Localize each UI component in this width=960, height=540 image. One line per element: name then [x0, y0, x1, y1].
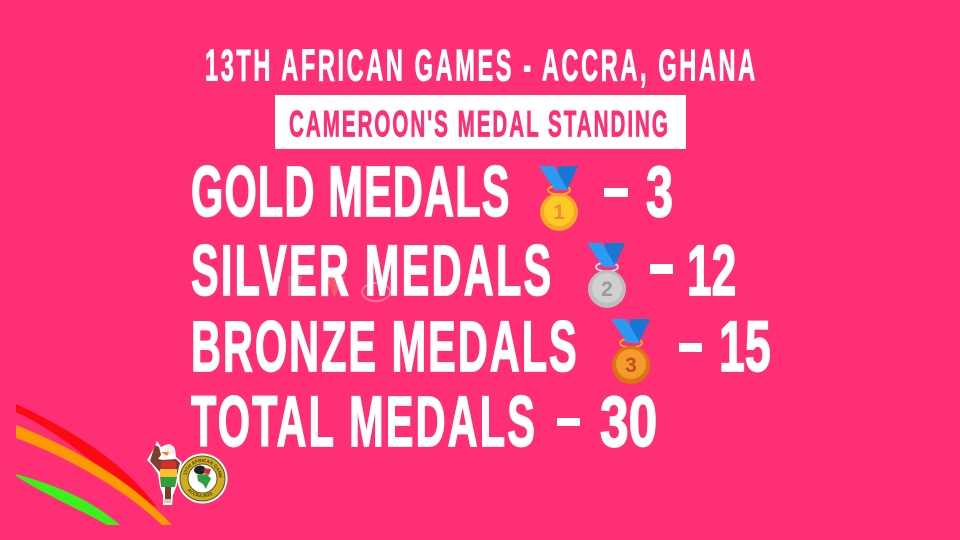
- subtitle banner: [275, 95, 686, 149]
- icon: games logo badge: [178, 454, 228, 504]
- subtitle banner: CAMEROON'S MEDAL STANDING: [289, 104, 668, 145]
- icon: games logo badge: 13TH AFRICAN GAMES: [184, 458, 222, 478]
- row: total medals: TOTAL MEDALS: [191, 382, 535, 462]
- icon: mascot: [147, 441, 182, 505]
- icon: games logo badge: ACCRA 2023: [187, 488, 212, 498]
- row: silver medals: [191, 230, 736, 311]
- icon: bronze medal: 3: [625, 354, 637, 377]
- row: bronze medals: [191, 306, 771, 387]
- title: 13TH AFRICAN GAMES - ACCRA, GHANA: [205, 41, 755, 90]
- row: gold medals: 3: [646, 152, 673, 231]
- row: silver medals: 12: [687, 230, 736, 311]
- row: bronze medals: 15: [719, 306, 771, 386]
- row: total medals: 30: [600, 383, 657, 462]
- decorative swooshes: [16, 404, 172, 525]
- icon: gold medal: 1: [553, 201, 565, 224]
- icon: silver medal: [587, 243, 626, 308]
- row: gold medals: GOLD MEDALS: [191, 152, 509, 232]
- row: silver medals: SILVER MEDALS: [191, 231, 551, 311]
- icon: silver medal: 2: [601, 278, 613, 301]
- row: gold medals: [191, 152, 673, 232]
- icon: gold medal: [539, 166, 578, 231]
- icon: bronze medal: [611, 319, 650, 384]
- watermark: [288, 276, 390, 301]
- row: bronze medals: BRONZE MEDALS: [191, 307, 577, 387]
